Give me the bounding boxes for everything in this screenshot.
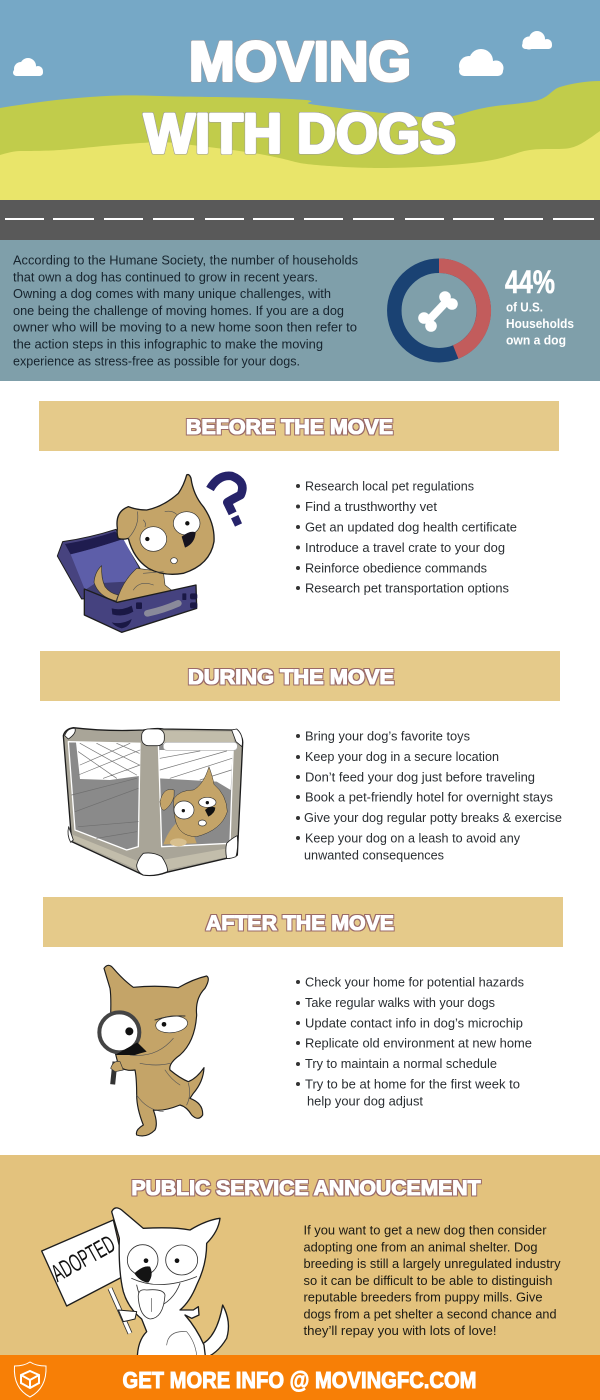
heading banner: during the move: DURING THE MOVE bbox=[188, 665, 394, 689]
illustration: dog in suitcase bbox=[57, 475, 242, 632]
checklist: during the move: Bring your dog’s favorite toys bbox=[305, 728, 470, 744]
heading: public service announcement: PUBLIC SERVICE ANNOUCEMENT bbox=[132, 1176, 480, 1200]
footer bar bbox=[0, 1355, 600, 1400]
heading banner: during the move bbox=[40, 651, 560, 701]
checklist: during the move: Don’t feed your dog just before traveling bbox=[305, 770, 535, 784]
checklist: after the move: Update contact info in dog’s microchip bbox=[305, 1016, 523, 1030]
donut chart 44% bbox=[394, 266, 484, 355]
psa text: reputable breeders from puppy mills. Give bbox=[304, 1290, 542, 1305]
checklist: during the move: Keep your dog on a leash to avoid any bbox=[305, 830, 520, 846]
checklist: before the move: Find a trusthworthy vet bbox=[305, 499, 437, 514]
checklist: after the move: help your dog adjust bbox=[307, 1094, 423, 1108]
statistic callout: Households bbox=[506, 317, 574, 331]
illustration: dog in crate bbox=[63, 728, 243, 875]
cloud left bbox=[13, 58, 43, 76]
illustration: adopted dog with sign bbox=[42, 1208, 228, 1362]
checklist: before the move: Research local pet regulations bbox=[305, 478, 474, 494]
illustration: dog with magnifying glass bbox=[99, 965, 208, 1136]
intro text: owner who will be moving to a new home soon then refer to bbox=[13, 320, 357, 335]
checklist: after the move: Try to maintain a normal schedule bbox=[305, 1056, 497, 1071]
checklist: after the move: Try to be at home for the first week to bbox=[305, 1076, 520, 1092]
footer call to action: GET MORE INFO @ MOVINGFC.COM bbox=[122, 1367, 476, 1393]
checklist: before the move bbox=[296, 478, 517, 596]
statistic callout bbox=[505, 264, 574, 348]
intro text: According to the Humane Society, the number of households bbox=[13, 252, 358, 268]
psa text: adopting one from an animal shelter. Dog bbox=[304, 1239, 538, 1254]
statistic callout: of U.S. bbox=[506, 300, 543, 314]
header landscape panel bbox=[0, 0, 600, 200]
checklist: during the move: unwanted consequences bbox=[304, 848, 444, 862]
checklist: before the move: Reinforce obedience commands bbox=[305, 560, 487, 576]
checklist: during the move: Give your dog regular potty breaks & exercise bbox=[304, 810, 562, 825]
checklist: after the move bbox=[296, 974, 532, 1108]
checklist: after the move: Replicate old environment at new home bbox=[305, 1036, 532, 1050]
checklist: before the move: Introduce a travel crate to your dog bbox=[305, 540, 505, 555]
checklist: after the move: Take regular walks with your dogs bbox=[305, 995, 495, 1010]
icon: bone bbox=[418, 291, 458, 332]
psa text: If you want to get a new dog then consider bbox=[304, 1222, 547, 1238]
intro text: experience as stress-free as possible for your dogs. bbox=[13, 353, 300, 368]
intro text: that own a dog has continued to grow in recent years. bbox=[13, 269, 318, 284]
title: WITH DOGS bbox=[144, 102, 456, 164]
heading banner: after the move bbox=[43, 897, 563, 947]
panel: public service announcement bbox=[0, 1155, 600, 1362]
road bbox=[0, 200, 600, 240]
title: MOVING bbox=[189, 30, 411, 92]
illustration: adopted dog with sign: ADOPTED bbox=[47, 1231, 120, 1288]
heading banner: before the move bbox=[39, 401, 559, 451]
statistic callout: 44% bbox=[505, 264, 555, 300]
checklist: after the move: Check your home for potential hazards bbox=[305, 974, 524, 990]
psa text bbox=[304, 1222, 561, 1338]
checklist: during the move: Keep your dog in a secure location bbox=[305, 749, 499, 764]
intro text bbox=[13, 252, 358, 368]
statistic callout: own a dog bbox=[506, 334, 566, 348]
checklist: before the move: Research pet transportation options bbox=[305, 580, 509, 596]
checklist: before the move: Get an updated dog health certificate bbox=[305, 520, 517, 534]
cloud center right bbox=[459, 49, 504, 76]
psa text: they’ll repay you with lots of love! bbox=[304, 1323, 496, 1338]
psa text: dogs from a pet shelter a second chance and bbox=[304, 1306, 556, 1321]
heading banner: after the move: AFTER THE MOVE bbox=[206, 911, 394, 935]
intro text: one being the challenge of moving homes. If you are a dog bbox=[13, 303, 344, 318]
title bbox=[144, 30, 456, 164]
checklist: during the move: Book a pet-friendly hotel for overnight stays bbox=[305, 790, 553, 804]
psa text: breeding is still a largely unregulated industry bbox=[304, 1256, 561, 1271]
intro text: the action steps in this infographic to make the moving bbox=[13, 336, 323, 352]
psa text: so it can be difficult to be able to distinguish bbox=[304, 1273, 552, 1288]
checklist: during the move bbox=[296, 728, 562, 862]
intro panel bbox=[0, 240, 600, 381]
cloud far right bbox=[522, 31, 552, 50]
icon: moving shield logo bbox=[14, 1362, 46, 1397]
intro text: Owning a dog comes with many unique challenges, with bbox=[13, 286, 331, 301]
heading banner: before the move: BEFORE THE MOVE bbox=[186, 415, 393, 439]
